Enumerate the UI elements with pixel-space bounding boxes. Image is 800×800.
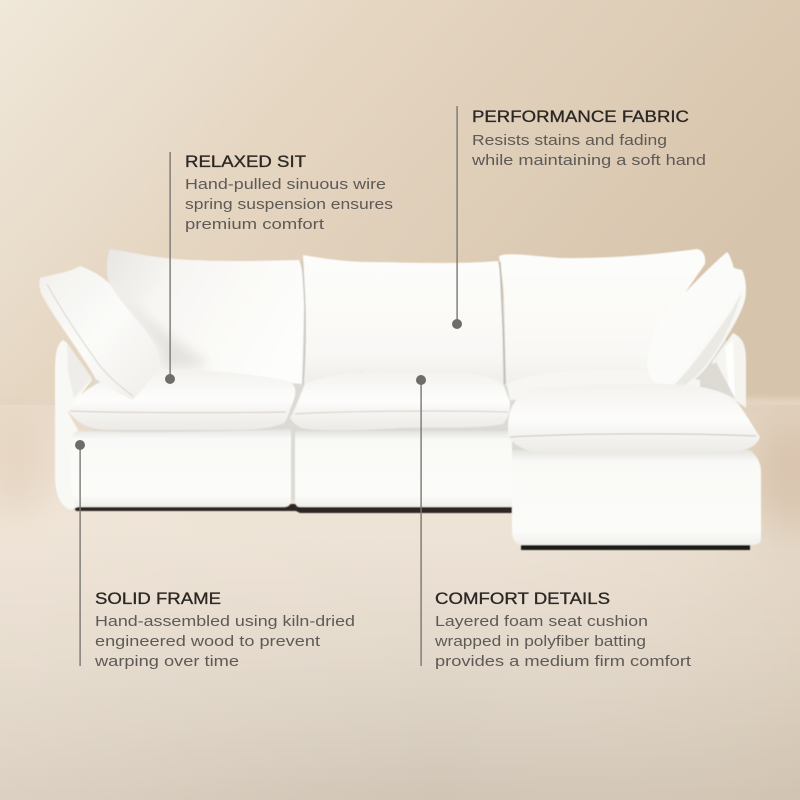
callout: relaxed sit: Hand-pulled sinuous wire (185, 176, 386, 193)
callout: performance fabric: while maintaining a soft hand (471, 152, 706, 169)
callout: solid frame: Hand-assembled using kiln-dried (95, 613, 355, 630)
callout: relaxed sit: spring suspension ensures (185, 196, 393, 213)
cushion seams (302, 262, 505, 384)
ottoman seat cushion (508, 384, 760, 454)
callout: relaxed sit: premium comfort (185, 216, 325, 233)
callout: performance fabric: PERFORMANCE FABRIC (472, 108, 689, 126)
callout: comfort details: provides a medium firm comfort (435, 653, 692, 670)
right pillow (647, 252, 746, 386)
right arm (700, 333, 746, 408)
floor shadows under sofa (72, 504, 750, 550)
shading behind left pillow (116, 290, 210, 370)
callout: solid frame: SOLID FRAME (95, 590, 221, 608)
seat cushion middle (290, 371, 510, 430)
base middle (295, 431, 512, 507)
callout: comfort details: Layered foam seat cushion (435, 613, 648, 630)
back cushion right (499, 249, 705, 390)
back cushion middle (303, 255, 503, 384)
callout: performance fabric (452, 106, 706, 329)
seat cushion right rear (507, 370, 700, 400)
callout: relaxed sit (165, 152, 393, 384)
callout: solid frame (75, 440, 355, 670)
callout: performance fabric: Resists stains and fading (472, 132, 667, 149)
callout: comfort details: wrapped in polyfiber batting (434, 633, 646, 650)
base left (71, 429, 291, 507)
back cushion left (107, 249, 304, 384)
callout: relaxed sit: RELAXED SIT (185, 153, 306, 171)
callout: comfort details (416, 375, 692, 670)
callout: comfort details: COMFORT DETAILS (435, 590, 610, 608)
left arm (55, 340, 92, 510)
sofa under-fill (90, 300, 735, 500)
callout: solid frame: engineered wood to prevent (95, 633, 321, 650)
callout: solid frame: warping over time (94, 653, 239, 670)
seat cushion left (68, 370, 295, 430)
left pillow (39, 266, 159, 400)
ottoman base (512, 450, 761, 545)
illustration: white sectional sofa (39, 249, 761, 550)
